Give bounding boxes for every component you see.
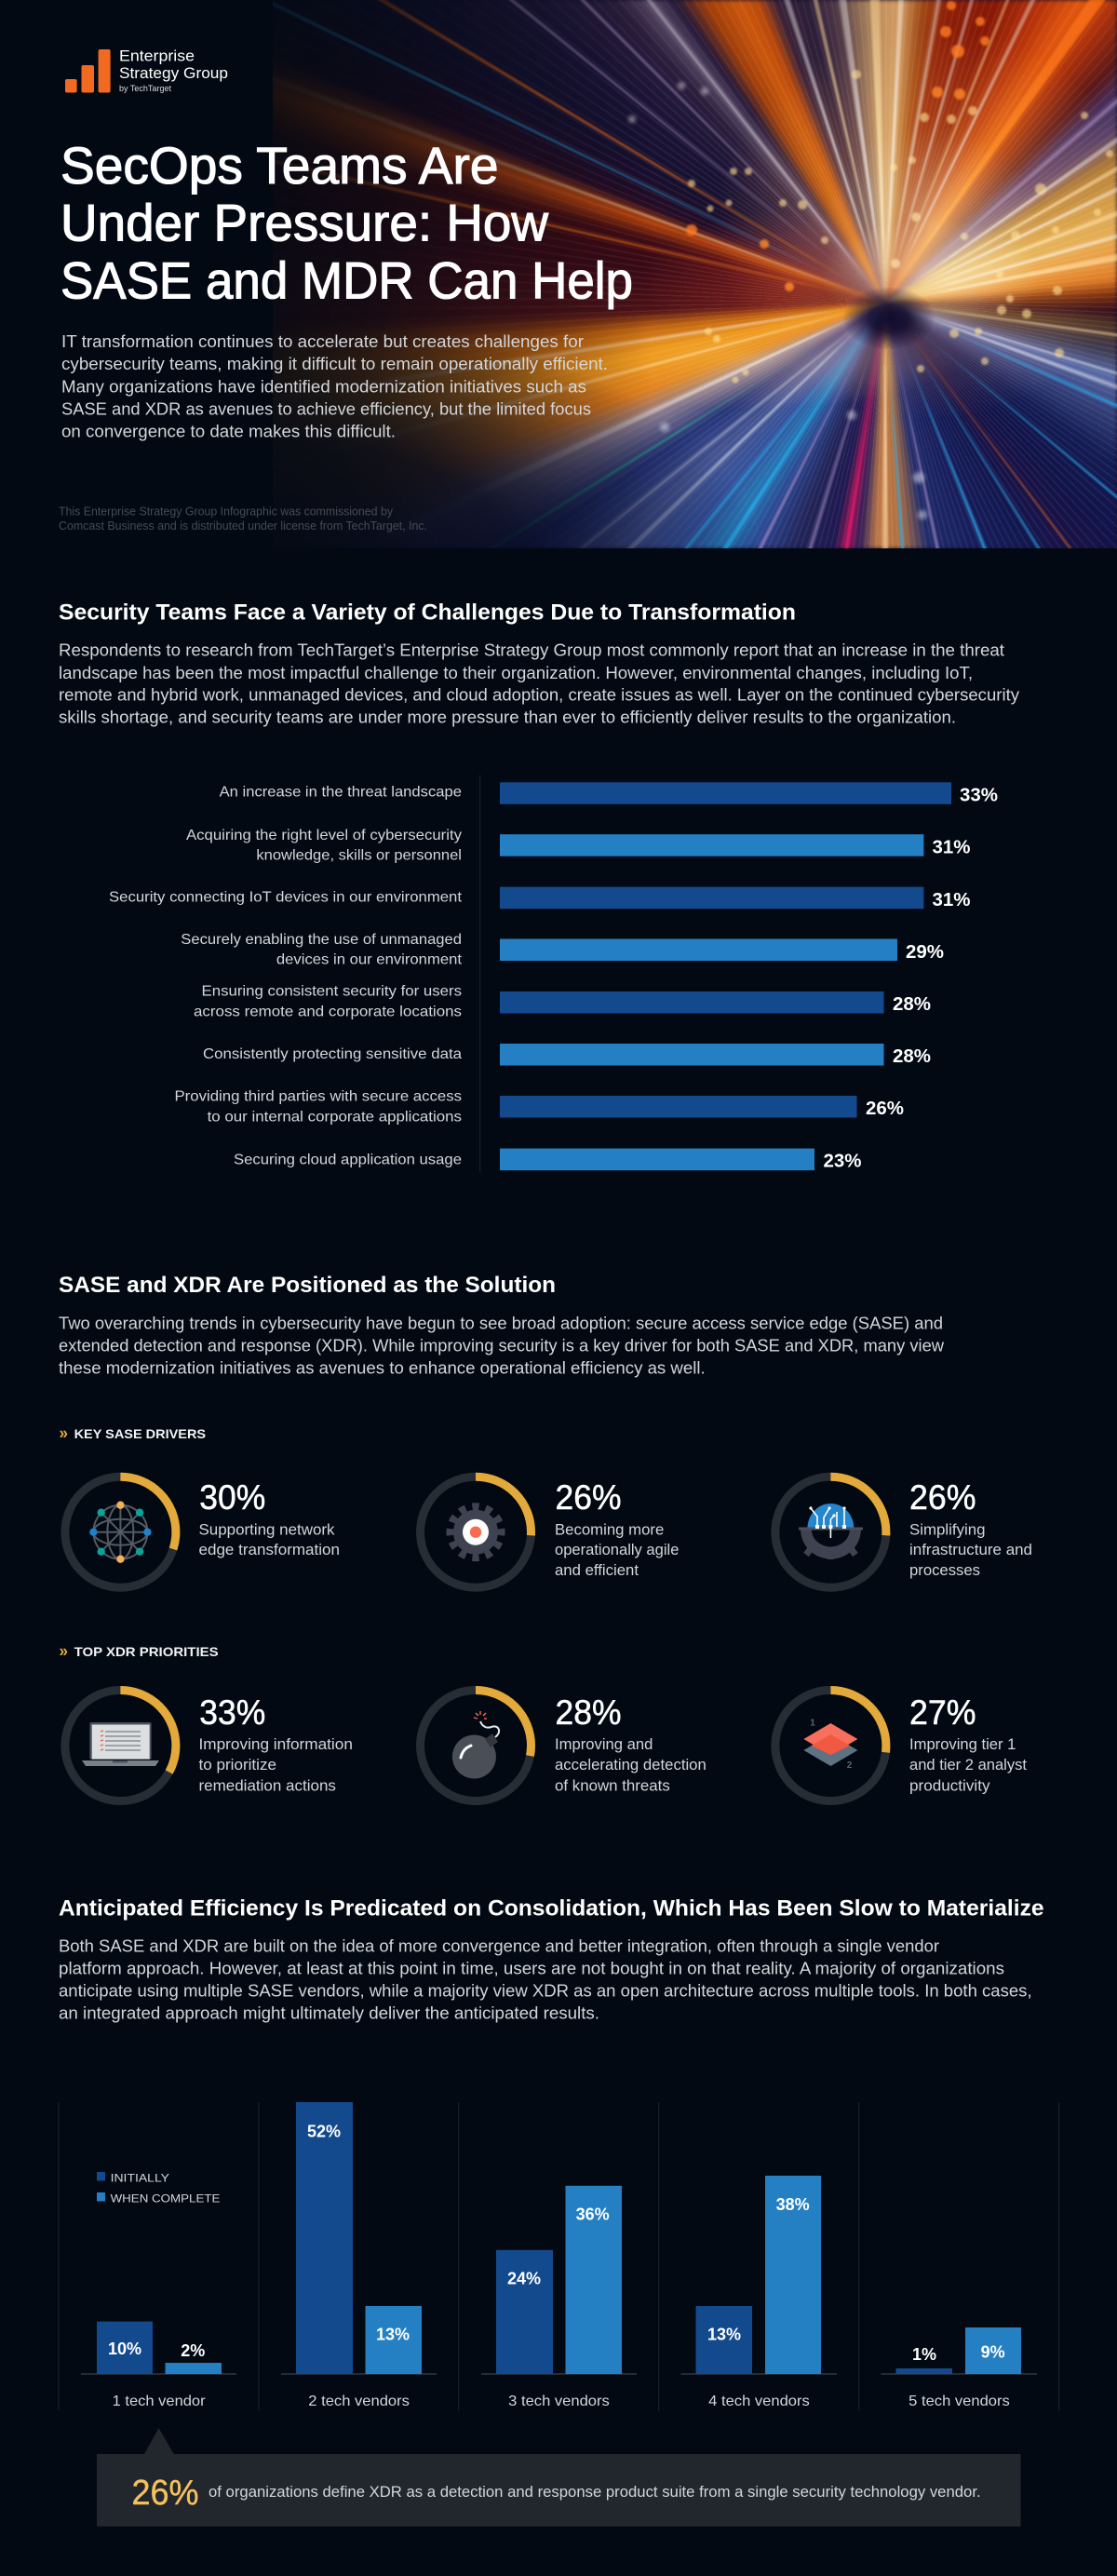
column group: 3 tech vendors: 24%	[507, 2270, 541, 2288]
subheading: top XDR priorities: »	[60, 1642, 68, 1661]
legend: WHEN COMPLETE	[111, 2192, 220, 2205]
bar: third parties: to our internal corporate applications	[208, 1110, 462, 1126]
callout: 26% single vendor	[97, 2428, 1020, 2527]
bar: knowledge and skills: knowledge, skills or personnel	[256, 848, 462, 864]
text block: solution intro: extended detection and response (XDR). While improving security is a key driver for both SASE and XDR, many view	[59, 1336, 945, 1355]
bar: remote and corporate users: across remote and corporate locations	[194, 1004, 462, 1019]
bar: third parties	[175, 1089, 904, 1126]
text block: consolidation intro: an integrated approach might ultimately deliver the anticipated results.	[59, 2003, 599, 2022]
text block: challenges intro: Respondents to research from TechTarget’s Enterprise Strategy Group most commonly report that an increase in the threat	[59, 641, 1004, 660]
icon: network globe	[89, 1501, 152, 1563]
bar: remote and corporate users: Ensuring consistent security for users	[201, 984, 462, 1000]
stat card: network edge 30%: 30%	[199, 1478, 265, 1517]
bar: sensitive data: 28%	[893, 1046, 931, 1067]
bar: cloud application usage: Securing cloud application usage	[234, 1153, 462, 1167]
legend	[97, 2171, 220, 2205]
hero intro text: Many organizations have identified modernization initiatives such as	[61, 376, 586, 396]
stat card: detection of known threats 28%: Improving and	[555, 1735, 653, 1753]
stat card: simplifying infrastructure 26%: Simplifying	[909, 1521, 985, 1539]
hero intro text: cybersecurity teams, making it difficult to remain operationally efficient.	[61, 354, 608, 373]
bar: knowledge and skills: Acquiring the right level of cybersecurity	[186, 828, 462, 843]
heading: challenges: Security Teams Face a Variety of Challenges Due to Transformation	[59, 600, 796, 626]
column group: 1 tech vendor: 2%	[181, 2341, 205, 2360]
title: SASE and MDR Can Help	[61, 250, 633, 309]
icon: half gear with circuit dome	[799, 1504, 863, 1559]
bar chart: challenges	[109, 775, 998, 1173]
commission note: Comcast Business and is distributed under license from TechTarget, Inc.	[59, 519, 427, 533]
stat card: agile and efficient 26%	[421, 1477, 679, 1587]
bar: remote and corporate users: 28%	[893, 994, 931, 1015]
stat card: analyst productivity 27%: 27%	[909, 1693, 976, 1732]
callout: 26% single vendor: 26%	[132, 2474, 199, 2513]
stat card: analyst productivity 27%: and tier 2 analyst	[909, 1756, 1027, 1774]
text block: challenges intro: skills shortage, and security teams are under more pressure than ever to efficiently deliver results to the organization.	[59, 708, 956, 726]
legend: INITIALLY	[111, 2171, 169, 2184]
stat card: agile and efficient 26%: operationally agile	[555, 1541, 679, 1558]
bar: knowledge and skills	[186, 828, 971, 864]
bar: cloud application usage: 23%	[823, 1151, 862, 1171]
bar: IoT devices: Security connecting IoT devices in our environment	[109, 890, 463, 906]
commission note: This Enterprise Strategy Group Infographic was commissioned by	[59, 505, 394, 518]
bar: unmanaged devices: Securely enabling the use of unmanaged	[181, 932, 462, 948]
column group: 3 tech vendors: 3 tech vendors	[508, 2394, 610, 2409]
text block: challenges intro	[59, 641, 1020, 726]
heading: consolidation: Anticipated Efficiency Is Predicated on Consolidation, Which Has Been Slow to Materialize	[59, 1896, 1044, 1922]
subheading: key SASE drivers: »	[60, 1424, 68, 1443]
hero intro text: on convergence to date makes this difficult.	[61, 422, 396, 441]
text block: challenges intro: remote and hybrid work, unmanaged devices, and cloud adoption, create issues as well. Layer on the continued cybersecurity	[59, 686, 1020, 705]
column group: 2 tech vendors: 2 tech vendors	[308, 2394, 410, 2409]
column group: 5 tech vendors: 1%	[912, 2345, 936, 2364]
icon: gear with target	[451, 1506, 501, 1558]
column group: 5 tech vendors	[895, 2327, 1021, 2409]
text block: consolidation intro	[59, 1936, 1032, 2022]
bar: third parties: Providing third parties with secure access	[175, 1089, 462, 1104]
icon: bomb	[452, 1711, 499, 1778]
stat card: analyst productivity 27%: Improving tier 1	[909, 1735, 1016, 1753]
stat card: agile and efficient 26%: Becoming more	[555, 1521, 664, 1539]
title	[61, 136, 633, 309]
bar: IoT devices: 31%	[933, 890, 971, 910]
bar: unmanaged devices: devices in our environment	[276, 951, 463, 967]
stat card: detection of known threats 28%: 28%	[555, 1693, 622, 1732]
subheading: top XDR priorities	[60, 1642, 219, 1661]
hero intro text: SASE and XDR as avenues to achieve efficiency, but the limited focus	[61, 398, 591, 418]
subheading: top XDR priorities: TOP XDR PRIORITIES	[74, 1644, 219, 1659]
stat card: analyst productivity 27%: productivity	[909, 1776, 990, 1794]
column group: 2 tech vendors: 52%	[307, 2123, 341, 2141]
stat card: prioritize remediation 33%	[65, 1691, 353, 1801]
callout: 26% single vendor: of organizations define XDR as a detection and response product suite from a single security technology vendor.	[209, 2483, 981, 2501]
stat card: prioritize remediation 33%: 33%	[199, 1693, 265, 1732]
column group: 2 tech vendors	[296, 2102, 422, 2409]
bar: remote and corporate users	[194, 984, 931, 1019]
bar: IoT devices	[109, 887, 971, 910]
logo: Enterprise Strategy Group by TechTarget	[65, 48, 228, 94]
column group: 3 tech vendors	[496, 2186, 622, 2409]
column group: 4 tech vendors: 38%	[776, 2195, 810, 2214]
stat card: network edge 30%: edge transformation	[199, 1541, 340, 1558]
heading: solution: SASE and XDR Are Positioned as the Solution	[59, 1273, 556, 1298]
grouped column chart: tech vendors	[59, 2102, 1059, 2411]
stat card: detection of known threats 28%: of known threats	[555, 1776, 670, 1794]
text block: solution intro	[59, 1314, 945, 1378]
stat card: prioritize remediation 33%: remediation actions	[199, 1776, 336, 1794]
stat card: prioritize remediation 33%: Improving information	[199, 1735, 353, 1753]
bar: unmanaged devices: 29%	[906, 942, 944, 963]
column group: 3 tech vendors: 36%	[576, 2205, 610, 2223]
stat card: network edge 30%	[65, 1477, 340, 1587]
stat card: simplifying infrastructure 26%: processes	[909, 1561, 980, 1579]
column group: 1 tech vendor	[97, 2322, 222, 2409]
icon: laptop with checklist	[82, 1722, 159, 1766]
column group: 4 tech vendors: 4 tech vendors	[708, 2394, 810, 2409]
bar: cloud application usage	[234, 1149, 862, 1171]
subheading: key SASE drivers: KEY SASE DRIVERS	[74, 1426, 206, 1441]
column group: 4 tech vendors	[696, 2176, 821, 2409]
commission note	[59, 505, 427, 533]
bar: threat landscape: 33%	[960, 786, 998, 806]
column group: 2 tech vendors: 13%	[376, 2326, 410, 2344]
hero intro text: IT transformation continues to accelerate but creates challenges for	[61, 331, 584, 351]
title: SecOps Teams Are	[61, 136, 499, 195]
stat card: simplifying infrastructure 26%	[775, 1477, 1032, 1587]
text block: challenges intro: landscape has been the most impactful challenge to their organization. However, environmental changes, including IoT,	[59, 664, 973, 682]
stat card: prioritize remediation 33%: to prioritize	[199, 1756, 276, 1774]
text block: consolidation intro: anticipate using multiple SASE vendors, while a majority view XDR as an open architecture across multiple tools. In both cases,	[59, 1981, 1032, 2000]
stat card: agile and efficient 26%: 26%	[555, 1478, 622, 1517]
text block: solution intro: Two overarching trends in cybersecurity have begun to see broad adoption: secure access service edge (SASE) and	[59, 1314, 943, 1332]
subheading: key SASE drivers	[60, 1424, 206, 1443]
bar: threat landscape: An increase in the threat landscape	[220, 784, 462, 801]
bar: threat landscape	[220, 782, 998, 806]
column group: 1 tech vendor: 10%	[108, 2340, 141, 2358]
stat card: simplifying infrastructure 26%: 26%	[909, 1478, 976, 1517]
text block: consolidation intro: Both SASE and XDR are built on the idea of more convergence and better integration, often through a single vendor	[59, 1936, 939, 1955]
bar: unmanaged devices	[181, 932, 944, 967]
column group: 5 tech vendors: 5 tech vendors	[908, 2394, 1010, 2409]
title: Under Pressure: How	[61, 193, 549, 251]
bar: sensitive data	[203, 1044, 931, 1067]
bar: knowledge and skills: 31%	[933, 838, 971, 858]
text block: solution intro: these modernization initiatives as avenues to enhance operational efficiency as well.	[59, 1359, 706, 1378]
hero background: light-speed burst image	[273, 0, 1117, 548]
stat card: agile and efficient 26%: and efficient	[555, 1561, 639, 1579]
logo: Enterprise Strategy Group by TechTarget: Strategy Group	[119, 65, 228, 82]
icon: stacked tier layers: 1	[810, 1719, 815, 1728]
stat card: network edge 30%: Supporting network	[199, 1521, 335, 1539]
icon: stacked tier layers: 2	[847, 1760, 853, 1771]
bar: third parties: 26%	[866, 1099, 904, 1119]
bar: sensitive data: Consistently protecting sensitive data	[203, 1046, 462, 1062]
stat card: analyst productivity 27%	[775, 1691, 1027, 1801]
logo: Enterprise Strategy Group by TechTarget: Enterprise	[119, 48, 195, 65]
stat card: simplifying infrastructure 26%: infrastructure and	[909, 1541, 1032, 1558]
icon: stacked tier layers	[803, 1719, 857, 1771]
hero intro text	[61, 331, 608, 441]
column group: 4 tech vendors: 13%	[707, 2326, 741, 2344]
stat card: detection of known threats 28%	[421, 1691, 707, 1801]
column group: 5 tech vendors: 9%	[981, 2342, 1005, 2361]
logo: Enterprise Strategy Group by TechTarget: by TechTarget	[119, 84, 171, 94]
text block: consolidation intro: platform approach. However, at least at this point in time, users are not bought in on that reality. A majority of organizations	[59, 1959, 1004, 1977]
stat card: detection of known threats 28%: accelerating detection	[555, 1756, 707, 1774]
column group: 1 tech vendor: 1 tech vendor	[113, 2394, 206, 2409]
